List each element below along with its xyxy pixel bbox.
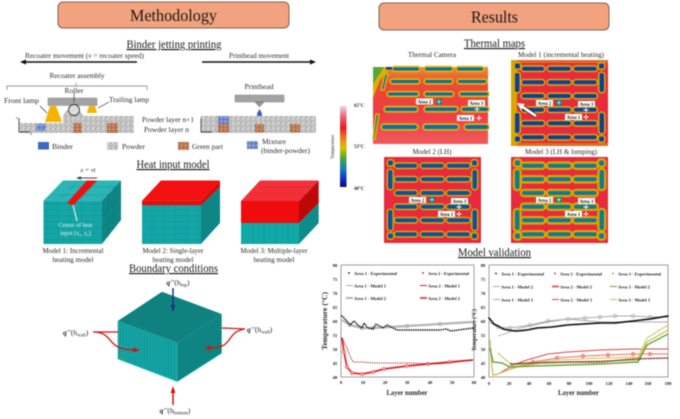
- line chart: model validation, 60 layers: Temperature (°C): [321, 291, 329, 350]
- thermal map: model 1 incremental heating: Model 1 (incremental heating): [518, 50, 604, 59]
- line chart: model validation, 180 layers: 55: [481, 333, 486, 338]
- thermal map: model 2 LH: Area 1: [440, 213, 454, 218]
- heading: heat input model: Heat input model: [136, 159, 210, 171]
- line chart: model validation, 60 layers: 10: [361, 380, 366, 385]
- heading: boundary conditions: Boundary conditions: [129, 263, 218, 275]
- recoater assembly diagram: Trailing lamp: [109, 95, 149, 104]
- arrow: recoater movement: [20, 51, 144, 64]
- section: heat input model: [42, 159, 319, 264]
- arrow: printhead movement: Printhead movement: [229, 51, 290, 60]
- legend: 60-layer chart: Area 2 - Model 1: [428, 284, 461, 288]
- arrow: bottom heat flux: bottom: [174, 412, 188, 416]
- legend: materials: (binder-powder): [261, 146, 310, 155]
- printhead diagram: Printhead: [244, 82, 274, 91]
- model 1 cube: incremental heating: Center of heat: [59, 222, 93, 229]
- series: area 3 experimental: [490, 334, 668, 367]
- line chart: model validation, 60 layers: 50: [450, 380, 455, 385]
- caption: model 2: heating model: [152, 255, 194, 264]
- legend: 60-layer chart: [346, 271, 470, 301]
- line chart: model validation, 180 layers: 45: [481, 361, 486, 366]
- heading: results: [379, 3, 609, 30]
- heading: model validation: Model validation: [458, 247, 531, 259]
- series: area 1 experimental: [489, 316, 668, 331]
- legend: 180-layer chart: Area 1 - Model 3: [501, 298, 534, 302]
- model 1 cube: incremental heating: input (x₀, z₀): [60, 230, 91, 237]
- line chart: model validation, 60 layers: 45: [333, 361, 338, 366]
- heading: binder jetting printing: Binder jetting printing: [126, 39, 222, 51]
- caption: model 3: Model 3: Multiple-layer: [240, 246, 308, 255]
- thermal map: model 3 LH and lumping: Model 3 (LH & lumping): [525, 147, 597, 156]
- arrow: recoater movement: Recoater movement (v = recoater speed): [25, 51, 144, 60]
- thermal map: thermal camera: Thermal Camera: [408, 50, 457, 59]
- recoater assembly diagram: Recoater assembly: [50, 71, 105, 80]
- arrow: right wall heat flux: q''(h: [247, 325, 261, 334]
- caption: model 2: Model 2: Single-layer: [142, 246, 204, 255]
- legend: 180-layer chart: Area 1 - Experimental: [501, 272, 545, 276]
- caption: model 1: heating model: [52, 255, 94, 264]
- line chart: model validation, 180 layers: 60: [481, 319, 486, 324]
- thermal map: model 1 incremental heating: [511, 50, 608, 146]
- line chart: model validation, 60 layers: 70: [333, 291, 338, 296]
- recoater assembly diagram: z: [16, 115, 18, 120]
- line chart: model validation, 180 layers: 80: [481, 263, 486, 268]
- series: area 2 experimental: [342, 338, 473, 364]
- arrow: right wall heat flux: [204, 325, 273, 350]
- legend: materials: Green part: [192, 142, 224, 151]
- line chart: model validation, 60 layers: 40: [428, 380, 433, 385]
- line chart: model validation, 60 layers: 60: [333, 319, 338, 324]
- legend: 180-layer chart: Area 2 - Experimental: [560, 272, 603, 276]
- model 3 cube: multiple-layer heating: [241, 180, 319, 244]
- arrow: right wall heat flux: wall: [261, 330, 270, 336]
- powder layer labels: Powder layer n: [144, 125, 189, 134]
- line chart: model validation, 180 layers: 80: [567, 381, 572, 386]
- series: area 1 models: [342, 320, 473, 328]
- thermal map: model 2 LH: Model 2 (LH): [412, 147, 452, 156]
- recoater assembly diagram: [4, 71, 149, 136]
- line chart: model validation, 180 layers: 40: [527, 381, 532, 386]
- caption: model 3: heating model: [254, 255, 294, 264]
- thermal map: model 3 LH and lumping: Area 3: [580, 200, 594, 205]
- panel: methodology: [4, 2, 319, 416]
- section: boundary conditions: [63, 263, 273, 416]
- line chart: model validation, 60 layers: 80: [333, 263, 338, 268]
- arrow: left wall heat flux: ): [86, 328, 89, 337]
- thermal map: thermal camera: Area 3: [470, 102, 484, 107]
- section: model validation: [321, 247, 672, 397]
- line chart: model validation, 180 layers: 140: [626, 381, 633, 386]
- arrow: right wall heat flux: ): [270, 325, 273, 334]
- thermal map: model 3 LH and lumping: Area 2: [538, 199, 552, 204]
- arrow: bottom heat flux: [160, 386, 191, 416]
- legend: 60-layer chart: Area 1 - Experimental: [354, 271, 398, 276]
- series: area 1 model 2: [489, 316, 668, 328]
- line chart: model validation, 60 layers: 75: [333, 277, 338, 282]
- heading: methodology: Methodology: [130, 6, 217, 25]
- legend: materials: Powder: [122, 142, 145, 151]
- line chart: model validation, 180 layers: 160: [645, 381, 652, 386]
- legend: 60-layer chart: Area 2 - Model 2: [428, 296, 461, 301]
- line chart: model validation, 180 layers: 70: [481, 291, 486, 296]
- series: area 3 model 3: [498, 325, 668, 365]
- thermal map: model 1 incremental heating: Area 3: [580, 103, 594, 108]
- colorbar: temperature scale: 65°C: [354, 104, 365, 109]
- section: binder jetting printing: [4, 39, 316, 155]
- thermal map: model 2 LH: [384, 147, 481, 243]
- powder layer labels: [142, 115, 194, 134]
- series: area 2 model 3: [500, 349, 668, 373]
- line chart: model validation, 60 layers: 40: [333, 375, 338, 380]
- heading: thermal maps: Thermal maps: [464, 38, 525, 50]
- line chart: model validation, 60 layers: Layer number: [386, 389, 428, 397]
- series: area 2 experimental: [510, 358, 668, 364]
- printhead diagram: [201, 82, 316, 133]
- recoater assembly diagram: x: [30, 131, 32, 136]
- line chart: model validation, 180 layers: Layer number: [558, 389, 600, 397]
- series: area 1 experimental: [342, 316, 473, 331]
- caption: model 2: [142, 246, 204, 264]
- thermal map: model 3 LH and lumping: [511, 147, 608, 243]
- legend: 180-layer chart: Area 3 - Model 2: [618, 284, 651, 290]
- heading: results: Results: [471, 8, 518, 26]
- arrow: top heat flux: q''(h: [166, 278, 181, 287]
- legend: 180-layer chart: Area 3 - Model 3: [618, 298, 651, 302]
- line chart: model validation, 60 layers: 50: [333, 347, 338, 352]
- line chart: model validation, 60 layers: 55: [333, 333, 338, 338]
- section: thermal maps: [331, 38, 608, 243]
- arrow: top heat flux: ): [187, 278, 190, 287]
- legend: 180-layer chart: Area 2 - Model 3: [560, 298, 593, 302]
- legend: 60-layer chart: Area 2 - Experimental: [428, 271, 470, 276]
- legend: materials: Mixture: [262, 137, 287, 146]
- line chart: model validation, 180 layers: 50: [481, 347, 486, 352]
- arrow: left wall heat flux: [63, 328, 140, 352]
- caption: model 1: Model 1: Incremental: [42, 246, 104, 255]
- model 2 cube: single-layer heating: [142, 180, 220, 244]
- thermal map: thermal camera: Area 1: [459, 117, 473, 122]
- recoater assembly diagram: Front lamp: [4, 96, 39, 105]
- legend: 180-layer chart: Area 1 - Model 2: [501, 284, 534, 290]
- legend: 60-layer chart: Area 1 - Model 2: [354, 296, 387, 301]
- arrow: left wall heat flux: q''(h: [63, 328, 77, 337]
- line chart: model validation, 180 layers: 180: [665, 381, 672, 386]
- line chart: model validation, 180 layers: 75: [481, 277, 486, 282]
- arrow: top heat flux: top: [181, 284, 188, 288]
- line chart: model validation, 60 layers: 20: [383, 380, 388, 385]
- series: area 3 model 2: [490, 330, 668, 375]
- thermal map: thermal camera: [373, 50, 488, 144]
- line chart: model validation, 60 layers: 65: [333, 305, 338, 310]
- legend: 180-layer chart: [493, 272, 662, 302]
- thermal map: model 1 incremental heating: Area 2: [538, 102, 552, 107]
- colorbar: temperature scale: 40°C: [354, 187, 365, 192]
- line chart: model validation, 180 layers: 40: [481, 375, 486, 380]
- caption: model 1: [42, 246, 104, 264]
- arrow: top heat flux: [166, 278, 190, 312]
- thermal map: model 2 LH: Area 2: [411, 199, 425, 204]
- line chart: model validation, 180 layers: 0: [488, 381, 491, 386]
- line chart: model validation, 180 layers: [471, 263, 672, 397]
- legend: 180-layer chart: Area 2 - Model 2: [560, 284, 593, 290]
- line chart: model validation, 60 layers: 60: [472, 380, 477, 385]
- colorbar: temperature scale: Temperature: [331, 135, 336, 159]
- series: area 1 model 3: [498, 319, 668, 336]
- colorbar: temperature scale: [331, 104, 365, 192]
- thermal map: model 1 incremental heating: Area 1: [567, 116, 581, 121]
- thermal map: thermal camera: Area 2: [418, 100, 432, 106]
- thermal map: model 2 LH: Area 3: [453, 200, 467, 205]
- thermal map: model 3 LH and lumping: Area 1: [567, 213, 581, 218]
- arrow: bottom heat flux: q''(h: [160, 406, 174, 415]
- legend: materials: [38, 137, 310, 155]
- legend: 60-layer chart: Area 1 - Model 1: [354, 284, 387, 288]
- recoater assembly diagram: Roller: [65, 86, 84, 95]
- line chart: model validation, 60 layers: 30: [405, 380, 410, 385]
- line chart: model validation, 60 layers: 0: [340, 380, 343, 385]
- line chart: model validation, 60 layers: [321, 263, 477, 397]
- series: area 2 model 2: [513, 354, 668, 365]
- caption: model 3: [240, 246, 308, 264]
- line chart: model validation, 180 layers: Temperature (°C): [471, 309, 478, 351]
- line chart: model validation, 180 layers: 120: [606, 381, 613, 386]
- panel: results: [321, 3, 672, 397]
- legend: 180-layer chart: Area 3 - Experimental: [618, 272, 662, 276]
- arrow: left wall heat flux: wall: [77, 334, 86, 338]
- arrow: printhead movement: [202, 51, 316, 64]
- model 1 cube: incremental heating: [44, 167, 121, 244]
- line chart: model validation, 180 layers: 20: [507, 381, 512, 386]
- line chart: model validation, 180 layers: 100: [586, 381, 593, 386]
- powder layer labels: Powder layer n+1: [142, 115, 194, 124]
- heading: methodology: [58, 2, 289, 28]
- colorbar: temperature scale: 53°C: [354, 145, 365, 150]
- arrow: bottom heat flux: ): [188, 406, 191, 415]
- line chart: model validation, 180 layers: 65: [481, 305, 486, 310]
- line chart: model validation, 180 layers: 60: [547, 381, 552, 386]
- legend: materials: Binder: [52, 142, 73, 151]
- cube: boundary conditions mesh: [118, 292, 222, 382]
- model 1 cube: incremental heating: x = vt: [79, 167, 96, 174]
- series: area 2 models: [342, 338, 473, 374]
